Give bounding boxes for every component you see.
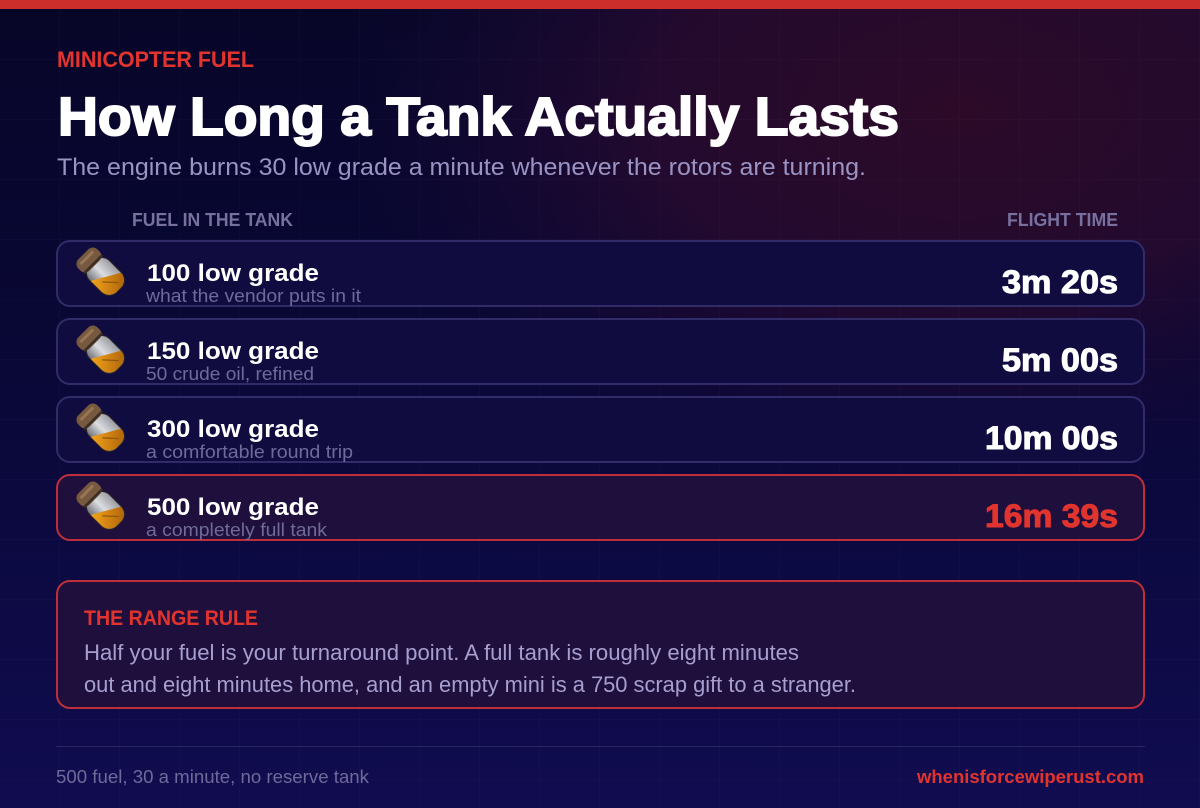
flight time: 5m 00s [1002,342,1118,378]
fuel note: a comfortable round trip [146,442,353,462]
column headers [132,210,1118,230]
flight time: 3m 20s [1002,264,1118,300]
fuel amount: 500 low grade [147,494,319,521]
title: How Long a Tank Actually Lasts [58,87,899,147]
icon: fuel jar [73,322,129,378]
callout body [84,640,856,697]
panel: row 500 low grade (highlighted) [57,475,1144,540]
fuel amount: 300 low grade [147,416,319,443]
callout: the range rule [57,581,1144,708]
fuel note: 50 crude oil, refined [146,364,314,384]
fuel note: what the vendor puts in it [145,286,361,306]
fuel note: a completely full tank [146,520,328,540]
flight time: 10m 00s [985,420,1118,456]
top accent bar [0,0,1200,9]
callout body: Half your fuel is your turnaround point. A full tank is roughly eight minutes [84,640,799,665]
panel: row 100 low grade [57,241,1144,306]
column headers: FLIGHT TIME [1007,210,1118,230]
icon: fuel jar [73,400,129,456]
footer url: whenisforcewiperust.com [916,767,1144,787]
callout body: out and eight minutes home, and an empty mini is a 750 scrap gift to a stranger. [84,672,856,697]
footer note: 500 fuel, 30 a minute, no reserve tank [56,767,370,787]
fuel amount: 150 low grade [147,338,319,365]
flight time: 16m 39s [985,498,1118,534]
panel: row 150 low grade [57,319,1144,384]
eyebrow label: MINICOPTER FUEL [57,47,254,72]
column headers: FUEL IN THE TANK [132,210,293,230]
panel: row 300 low grade [57,397,1144,462]
callout heading: THE RANGE RULE [84,607,258,630]
fuel amount: 100 low grade [147,260,319,287]
icon: fuel jar [73,478,129,534]
icon: fuel jar [73,244,129,300]
subtitle: The engine burns 30 low grade a minute whenever the rotors are turning. [57,154,866,181]
